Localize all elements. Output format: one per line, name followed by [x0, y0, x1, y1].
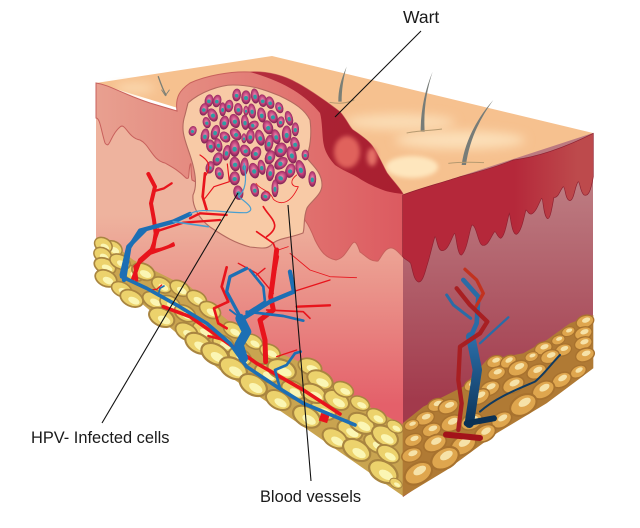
label: blood vessels: Blood vessels — [260, 488, 361, 506]
leader line: blood vessels — [288, 205, 311, 481]
infected tissue zone — [183, 85, 322, 248]
blood vessels: upper left and infected zone — [124, 155, 298, 280]
infected cells — [187, 88, 316, 203]
label: HPV infected cells: HPV- Infected cells — [31, 429, 169, 447]
leader line: wart — [335, 31, 421, 117]
wart mound — [250, 72, 403, 194]
left skin face: dermis — [96, 83, 403, 440]
blood vessels: lower left network — [122, 230, 357, 425]
epidermis layer on left face — [96, 72, 403, 261]
fat layer: right face — [400, 313, 596, 497]
right skin face: dermis — [403, 133, 593, 497]
hairs on the right of the wart — [407, 72, 493, 165]
right face epidermis — [403, 133, 593, 282]
blood vessels: right face — [446, 269, 560, 438]
leader line: HPV-infected cells — [102, 193, 238, 423]
hairs on the left of the wart — [158, 67, 354, 103]
top skin surface — [96, 56, 593, 195]
fat layer: left face — [91, 234, 405, 496]
label: wart: Wart — [403, 7, 439, 27]
